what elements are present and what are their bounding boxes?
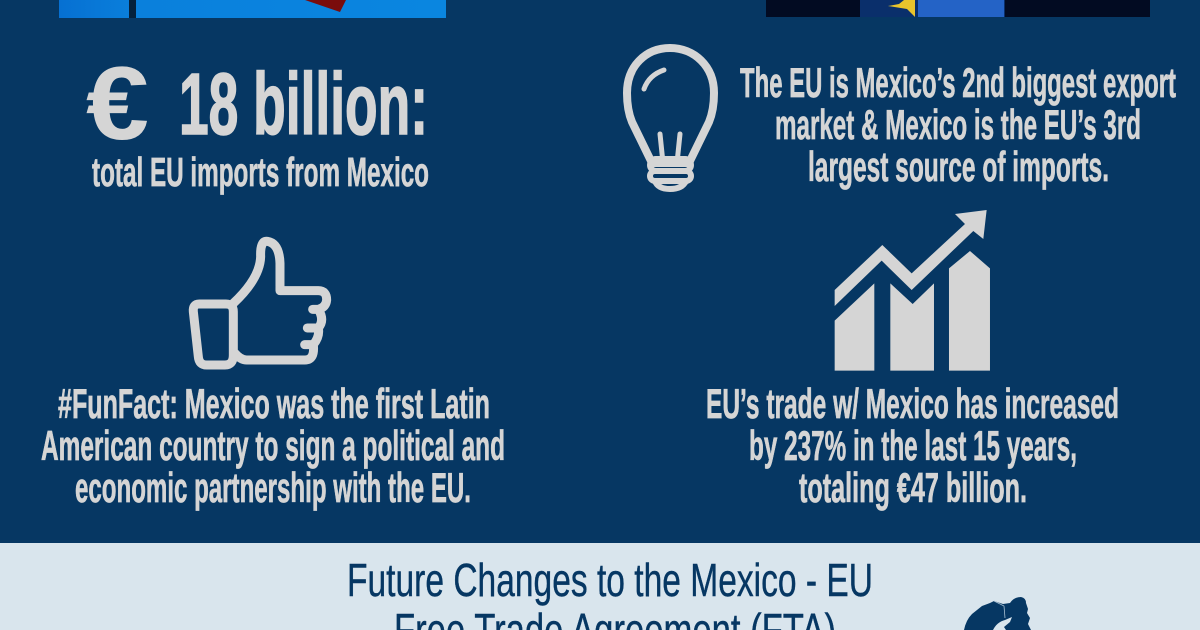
text: fun fact: American country to sign a political and bbox=[41, 422, 505, 469]
heading: future changes to FTA bbox=[347, 554, 873, 630]
stat: 18 billion EU imports bbox=[86, 46, 429, 195]
heading: future changes to FTA: Future Changes to the Mexico - EU bbox=[347, 554, 873, 606]
photo: Mexico flag on blue background bbox=[59, 0, 446, 18]
text: trade growth fact: totaling €47 billion. bbox=[799, 464, 1027, 511]
stat caption: total EU imports from Mexico bbox=[92, 149, 429, 195]
photo: EU flag and speaker bbox=[766, 0, 1150, 17]
map: Europe silhouette bbox=[964, 597, 1031, 630]
icon: light bulb bbox=[627, 48, 714, 189]
icon: growth bar chart with arrow bbox=[835, 210, 990, 371]
text: export market fact bbox=[740, 59, 1176, 190]
text: fun fact bbox=[41, 380, 505, 511]
text: fun fact: #FunFact: Mexico was the first Latin bbox=[58, 380, 490, 427]
icon: thumbs up bbox=[193, 241, 327, 365]
stat heading: 18 billion: bbox=[179, 56, 428, 153]
text: fun fact: economic partnership with the EU. bbox=[75, 464, 471, 511]
panel: future changes bbox=[0, 543, 1200, 630]
icon: euro sign: € bbox=[86, 46, 149, 162]
text: trade growth fact bbox=[706, 380, 1119, 511]
